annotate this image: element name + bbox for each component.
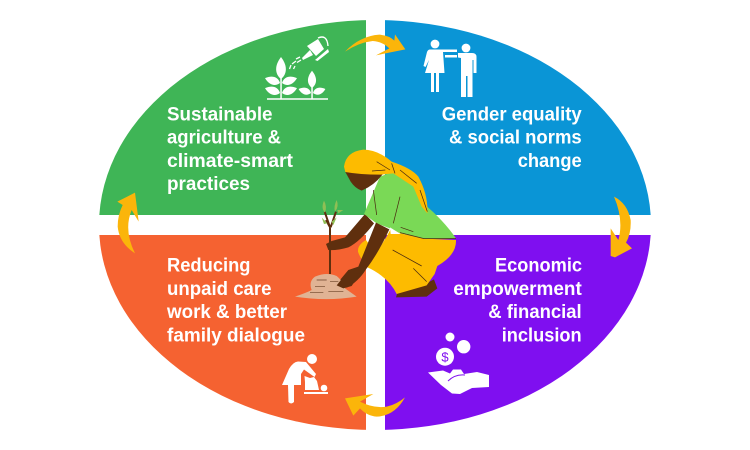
soil mound — [295, 274, 357, 299]
heading: economic empowerment: & financial — [488, 301, 582, 323]
heading: gender equality: & social norms — [449, 126, 582, 148]
heading: sustainable agriculture: climate-smart — [167, 150, 293, 172]
clothing folds — [372, 162, 456, 282]
arrow: right — [611, 197, 632, 257]
heading: sustainable agriculture: practices — [167, 173, 250, 195]
panel: reducing unpaid care — [90, 235, 366, 440]
heading: economic empowerment: empowerment — [453, 278, 582, 300]
heading: reducing unpaid care: Reducing — [167, 254, 250, 276]
heading: economic empowerment: inclusion — [502, 324, 582, 346]
icon: coins over open hand — [428, 332, 489, 394]
panel: sustainable agriculture — [90, 10, 366, 215]
cycle infographic — [99, 20, 651, 430]
arrow: top — [345, 34, 405, 55]
back leg sliver — [358, 240, 373, 266]
headscarf — [344, 150, 427, 213]
heading: economic empowerment — [453, 254, 582, 346]
panel: economic empowerment — [385, 235, 661, 440]
sapling — [322, 200, 343, 274]
face and neck — [345, 172, 383, 191]
heading: sustainable agriculture: Sustainable — [167, 104, 273, 126]
heading: economic empowerment: Economic — [495, 254, 582, 276]
foot — [396, 279, 437, 297]
icon: parent changing baby — [282, 354, 328, 404]
arrow: left — [117, 193, 139, 253]
panel: gender equality — [385, 10, 661, 215]
heading: gender equality — [442, 104, 582, 172]
hand over soil — [337, 273, 360, 288]
trousers — [366, 227, 456, 294]
heading: reducing unpaid care: family dialogue — [167, 324, 305, 346]
icon: watering can and plants — [264, 37, 329, 100]
front arm — [337, 223, 389, 288]
heading: gender equality: Gender equality — [442, 104, 582, 126]
heading: reducing unpaid care: unpaid care — [167, 278, 272, 300]
heading: sustainable agriculture: agriculture & — [167, 126, 281, 148]
heading: sustainable agriculture — [167, 104, 293, 195]
shirt — [364, 172, 456, 239]
back arm — [326, 214, 374, 250]
arrow: bottom — [345, 394, 405, 417]
white notch under arm — [390, 227, 401, 234]
heading: reducing unpaid care: work & better — [166, 301, 287, 323]
icon: woman and man equality — [424, 40, 476, 97]
heading: reducing unpaid care — [166, 254, 305, 346]
icon: coins over open hand: $ — [441, 350, 449, 364]
illustration: woman planting a sapling — [295, 150, 456, 299]
heading: gender equality: change — [518, 150, 582, 172]
